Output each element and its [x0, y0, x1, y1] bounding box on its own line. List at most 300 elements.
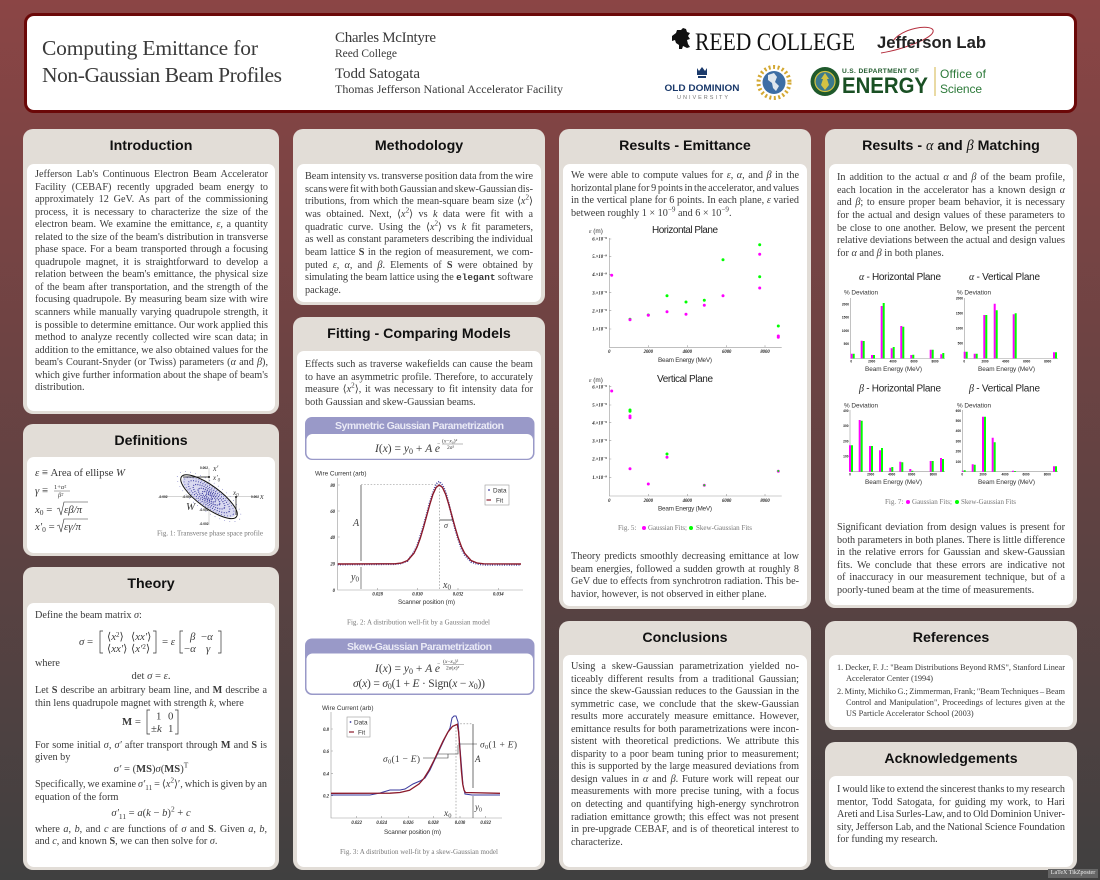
figure 7d: beta vertical bar chart: 2000 [979, 472, 987, 476]
figure 5a: horizontal plane emittance scatter plot: 6000 [722, 350, 732, 355]
figure 5b: vertical plane emittance scatter plot: −9 [603, 456, 607, 460]
figure 3: skew-Gaussian fit chart: y [475, 802, 479, 812]
text: solving for sigma: and c, and known S, we can then solve for σ. [35, 836, 217, 847]
panel body: definitions [27, 457, 275, 553]
figure 1: transverse phase space ellipse: -0.001 [199, 508, 209, 512]
figure 3: skew-Gaussian fit chart: 0 [388, 758, 391, 766]
figure 7b: alpha vertical bar chart: 1500 [956, 312, 963, 316]
figure 7a: alpha horizontal bar chart: 0 [850, 360, 852, 364]
poster title [42, 36, 282, 87]
figure 3: skew-Gaussian fit chart: Fit [358, 730, 365, 736]
panel body: introduction [27, 164, 275, 411]
text: S and M description: Let S describe an arbitrary beam line, and M describe a [35, 685, 267, 696]
figure 5b: vertical plane emittance scatter plot [589, 374, 782, 512]
equation: beam matrix: β [189, 631, 196, 643]
figure 7b: alpha vertical bar chart: % Deviation [957, 290, 991, 296]
text: references list: US Particle Accelerator School (2003) [846, 709, 974, 718]
panel: results - emittance [559, 129, 811, 609]
figure 7c: beta horizontal bar chart: 0 [849, 472, 851, 476]
figure 1: transverse phase space ellipse: W [186, 501, 196, 513]
figure 7d: beta vertical bar chart: 400 [956, 429, 961, 433]
equation: beam matrix: ⟨x [107, 631, 116, 643]
definition formulas: = [44, 504, 52, 516]
equation: beam matrix: ⟨xx′⟩ [131, 631, 151, 643]
figure 5a: horizontal plane emittance scatter plot: 1.×10 [592, 328, 603, 332]
text: introduction: Facility (CEBAF) recently upgraded beam energy to [35, 182, 268, 193]
figure 2: Gaussian fit chart: Wire Current (arb) [315, 470, 366, 478]
block: skew-Gaussian parametrization: A e [424, 663, 440, 675]
panel: results - alpha and beta matching [825, 129, 1077, 608]
figure 5a: horizontal plane emittance scatter plot: −9 [603, 254, 607, 258]
figure 2: Gaussian fit chart: σ [444, 521, 449, 530]
text: fitting intro: Effects such as traverse wakefields can cause the beam [305, 359, 533, 370]
text: sigma11 description: Specifically, we examine σ′11 = ⟨x2⟩′, which is given by an [35, 777, 267, 792]
heading: results emittance: Results - Emittance [619, 138, 751, 154]
text: introduction: quadrupole magnet, it is straightforward to develop a [35, 257, 268, 268]
text: acknowledgements: sity, Jefferson Lab, and the National Science Foundation [837, 822, 1065, 833]
definition formulas: x′ [34, 521, 43, 533]
equation: beam matrix: 2 [142, 643, 146, 651]
figure 7b: alpha vertical bar chart: 2000 [981, 360, 989, 364]
figure 3: skew-Gaussian fit chart: 0 [479, 808, 482, 814]
text: methodology: Beam intensity vs. transverse position data from the wire [305, 171, 533, 182]
logo: Old Dominion University [664, 67, 740, 101]
text: emittance intro: between roughly 1 × 10−9 and 6 × 10−9. [571, 205, 732, 219]
figure 5a: horizontal plane emittance scatter plot: 2.×10 [592, 310, 603, 314]
figure 7d: beta vertical bar chart: Beam Energy (MeV) [978, 479, 1035, 486]
figure 7 caption with legend: Fig. 7: [885, 498, 903, 506]
panel body: acknowledgements [829, 776, 1073, 867]
figure 2: Gaussian fit chart: 40 [329, 536, 336, 541]
figure 5b: vertical plane emittance scatter plot: −9 [603, 402, 607, 406]
logo: Old Dominion University: UNIVERSITY [677, 95, 728, 101]
equation: beam matrix: −α [201, 631, 213, 643]
figure 3: skew-Gaussian fit chart: E) [411, 755, 420, 765]
text: conclusions: this is supported by the large measured deviations from [571, 761, 799, 772]
block: skew-Gaussian parametrization: I(x) = y [375, 663, 409, 675]
heading: introduction: Introduction [110, 138, 192, 154]
text: fitting intro: measure ⟨x2⟩, it was necessary to fit intensity data for [305, 382, 533, 395]
figure 3: skew-Gaussian fit chart: 0.6 [323, 750, 330, 755]
block: symmetric Gaussian parametrization: Symmetric Gaussian Parametrization [335, 420, 504, 432]
figure 5 caption with legend [618, 524, 752, 532]
figure 2: Gaussian fit chart [315, 470, 523, 626]
figure 3: skew-Gaussian fit chart [322, 705, 517, 856]
text: methodology: as well as constant parameters describing the individual [305, 234, 533, 245]
figure 5b: vertical plane emittance scatter plot: 1.×10 [592, 476, 603, 481]
block: skew-Gaussian parametrization: (x−x₀)² [443, 658, 459, 665]
text: matching intro: In addition to the actual α and β of the beam profile, [837, 172, 1065, 183]
logo: US Department of Energy: U.S. DEPARTMENT OF [842, 68, 919, 75]
text: acknowledgements: Areti and Lisa Surles-Law, and to Old Dominion Univer- [837, 809, 1065, 820]
figure 7c: beta horizontal bar chart: 8000 [930, 472, 937, 476]
text: conclusions: in pre-upgrade CEBAF, and is of theoretical interest to [571, 824, 799, 835]
text: sigma11 description: equation of the form [35, 792, 118, 803]
figure 7b: alpha vertical bar chart: 4000 [1002, 360, 1009, 364]
figure 1: transverse phase space ellipse: x′ [212, 464, 219, 473]
text: references list: Accelerator Center (1994) [846, 674, 933, 683]
block: symmetric Gaussian parametrization: 2σ² [447, 445, 454, 451]
figure 1: transverse phase space ellipse [157, 463, 264, 538]
figure 7b: alpha vertical bar chart: 1000 [956, 326, 963, 330]
panel: methodology [293, 129, 545, 305]
figure 7a: alpha horizontal bar chart [842, 272, 945, 373]
text: references list: Control and Manipulation", Proceedings of lectures given at the [846, 698, 1065, 707]
definition formulas: = [46, 521, 55, 533]
figure 5a: horizontal plane emittance scatter plot: 5.×10 [592, 255, 603, 260]
equation: thin lens matrix: ±k [151, 723, 162, 735]
authors: Reed College [335, 48, 397, 60]
logo: Old Dominion University: OLD DOMINION [664, 83, 740, 93]
figure 1: transverse phase space ellipse: 0.002 [251, 495, 259, 499]
panel body: references [829, 655, 1073, 727]
figure 1: transverse phase space ellipse: 0.002 [200, 466, 208, 470]
figure 5a: horizontal plane emittance scatter plot: −9 [603, 308, 607, 312]
poster title: Non-Gaussian Beam Profiles [42, 63, 282, 87]
figure 2: Gaussian fit chart: 0.030 [412, 592, 423, 598]
figure 3: skew-Gaussian fit chart: σ [383, 755, 388, 765]
figure 7d: beta vertical bar chart: 300 [956, 440, 961, 444]
figure 5b: vertical plane emittance scatter plot: 3.×10 [592, 440, 603, 444]
figure 5b: vertical plane emittance scatter plot: 6000 [722, 499, 732, 504]
text: S and M description: thin lens quadrupole magnet with strength k, where [35, 698, 244, 709]
definition formulas: εγ/π [64, 521, 82, 533]
panel: conclusions [559, 621, 811, 870]
figure 7a: alpha horizontal bar chart: 4000 [889, 360, 897, 364]
figure 3: skew-Gaussian fit chart: 0 [448, 812, 451, 820]
poster title: Computing Emittance for [42, 36, 258, 60]
text: initial sigma: given by [35, 752, 70, 763]
panel body: theory [27, 603, 275, 867]
figure 5b: vertical plane emittance scatter plot: 5.×10 [592, 404, 603, 408]
panel body: results matching [829, 164, 1073, 605]
text: conclusions: radiation emittance growth; this effect was not present [571, 812, 799, 823]
figure 7a: alpha horizontal bar chart: 6000 [910, 360, 918, 364]
figure 7 caption with legend: Gaussian Fits; [912, 498, 952, 506]
authors: Todd Satogata [335, 66, 420, 82]
figure 7 caption with legend [885, 498, 1016, 506]
text: conclusions: on detecting and quantifying high-energy synchrotron [571, 799, 799, 810]
text: emittance intro: horizontal plane for 9 points in the accelerator, and values [571, 183, 799, 194]
text: introduction: method to analyze recently collected wire scan data; in [35, 332, 268, 343]
figure 1: transverse phase space ellipse: x [259, 492, 264, 501]
text: methodology: was obtained. Next, ⟨x2⟩ vs k data were fit with a [305, 207, 533, 220]
text: conclusions: results more accurately measure emittance. However, [571, 711, 799, 722]
figure 7d: beta vertical bar chart: 8000 [1044, 472, 1051, 476]
figure 5a: horizontal plane emittance scatter plot: 8000 [760, 350, 770, 355]
equation: sigma transport: σ′ = (MS)σ(MS)T [114, 760, 188, 775]
text: matching intro: relative deviations between the actual and design values [837, 235, 1065, 246]
figure 2: Gaussian fit chart: 0 [447, 584, 451, 592]
definition formulas: 0 [42, 525, 46, 534]
figure 5b: vertical plane emittance scatter plot: −9 [603, 384, 607, 388]
text: matching intro [837, 172, 1066, 259]
heading: fitting: Fitting - Comparing Models [327, 326, 511, 342]
text: S and M description [35, 685, 267, 709]
figure 5b: vertical plane emittance scatter plot: 4.×10 [592, 422, 603, 426]
figure 5b: vertical plane emittance scatter plot: 4000 [682, 499, 693, 504]
figure 7c: beta horizontal bar chart: β - Horizontal Plane [858, 384, 941, 394]
block: skew-Gaussian parametrization: E · Sign(x − x [412, 678, 474, 690]
figure 3: skew-Gaussian fit chart: 0.8 [323, 728, 330, 733]
definition formulas: εβ/π [64, 504, 83, 516]
text: conclusions: Using a skew-Gaussian parametrization yielded no- [571, 661, 799, 672]
authors: Charles McIntyre [335, 30, 436, 46]
text: sigma11 description [35, 777, 267, 803]
equation: beam matrix: ⟩ [120, 631, 124, 643]
text: conclusions: ticeably different results from a traditional Gaussian; [571, 674, 799, 685]
text: methodology: quadratic curve. Using the ⟨x2⟩ vs k fit parameters, [305, 219, 533, 233]
figure 3: skew-Gaussian fit chart: Scanner position (m) [384, 829, 441, 836]
text: introduction: electron beam. We examine the emittance, ε, a quantity [35, 219, 268, 230]
text: introduction: which give further information about the shape of beam's [35, 370, 268, 381]
text: introduction: related to the size of the beam's distribution in transverse [35, 232, 268, 243]
figure 7c: beta horizontal bar chart: 4000 [888, 472, 895, 476]
figure 3: skew-Gaussian fit chart: 0 [485, 744, 488, 751]
logo: US Department of Energy [810, 67, 987, 98]
authors [335, 30, 563, 96]
figure 5b: vertical plane emittance scatter plot: 6.×10 [592, 386, 603, 390]
figure 7a: alpha horizontal bar chart: 2000 [868, 360, 875, 364]
figure 2: Gaussian fit chart: Fig. 2: A distribution well-fit by a Gaussian model [347, 618, 490, 626]
heading: references: References [913, 630, 989, 646]
equation: thin lens matrix: M = [122, 716, 141, 728]
text: methodology: tributions, from which the mean-square beam size ⟨x2⟩ [305, 194, 533, 207]
definition formulas: ε ≡ Area of ellipse W [35, 467, 126, 479]
text: conclusions: characterize. [571, 837, 623, 848]
panel: acknowledgements [825, 742, 1077, 870]
figure 3: skew-Gaussian fit chart: 0.022 [351, 821, 363, 826]
text: introduction: addition to the emittance, we also obtained values for the [35, 345, 268, 356]
text: emittance conclusion: havior, however, is not observed in either plane. [571, 589, 767, 600]
panel body: conclusions [563, 655, 807, 867]
figure 7b: alpha vertical bar chart: 0 [963, 360, 965, 364]
equation: beam matrix: ⟩ [146, 643, 150, 655]
text: introduction [35, 169, 268, 393]
figure 7c: beta horizontal bar chart: 100 [843, 454, 849, 458]
figure 7b: alpha vertical bar chart: α - Vertical Plane [969, 272, 1040, 283]
figure 5a: horizontal plane emittance scatter plot: −9 [603, 326, 607, 330]
text: matching intro: for α and β in both planes. [837, 248, 944, 259]
figure 7c: beta horizontal bar chart: % Deviation [844, 402, 878, 410]
text: matching conclusion: both parameters in both planes. There is little difference [837, 535, 1065, 546]
figure 5a: horizontal plane emittance scatter plot: −9 [603, 236, 607, 240]
equation: beam matrix: = ε [162, 636, 176, 648]
block: skew-Gaussian parametrization: σ(x) = σ [353, 678, 388, 690]
panel: references [825, 621, 1077, 730]
equation: thin lens matrix: 1 [156, 710, 161, 722]
figure 1: transverse phase space ellipse: -0.002 [158, 495, 168, 499]
text: introduction: relation between the beam's emittance, the physical size [35, 269, 268, 280]
block: skew-Gaussian parametrization: − [437, 662, 440, 668]
figure 5b: vertical plane emittance scatter plot: 2.×10 [592, 458, 603, 462]
text: fitting intro: to have an asymmetric profile. Therefore, to accurately [305, 372, 533, 383]
figure 7d: beta vertical bar chart: β - Vertical Plane [968, 384, 1040, 394]
figure 2: Gaussian fit chart: A [352, 518, 360, 529]
figure 5a: horizontal plane emittance scatter plot: 0 [608, 350, 611, 355]
definition formulas: x [34, 504, 40, 516]
text: initial sigma [35, 740, 267, 763]
text: acknowledgements: mentor, Todd Satogata, for guiding my work, to Hari [837, 797, 1065, 808]
text: matching conclusion: Significant deviation from design values is present for [837, 522, 1065, 533]
footer badge: LaTeX tikzposter: LaTeX TikZposter [1051, 870, 1095, 876]
block: symmetric Gaussian parametrization: (x−x₀)² [442, 438, 458, 444]
figure 3: skew-Gaussian fit chart: 0.030 [455, 821, 466, 826]
equation: beam matrix: −α [184, 643, 196, 655]
text: emittance intro [571, 170, 799, 219]
text: conclusions: symmetric case, we conclude that the skew-Gaussian [571, 699, 799, 710]
text: methodology: simulating the beam lattice using the elegant software [305, 272, 533, 283]
figure 7a: alpha horizontal bar chart: 1000 [842, 329, 849, 333]
logo: US Department of Energy: Science [940, 82, 982, 96]
text: introduction: beam's Courant-Snyder (or Twiss) parameters (α and β), [35, 357, 268, 368]
text: matching intro: and β; to ensure proper beam behavior, it is necessary [837, 197, 1065, 208]
figure 2: Gaussian fit chart: x [443, 580, 447, 591]
equation: beam matrix [79, 631, 221, 655]
text: introduction: is possible to determine emittance. Our work applied this [35, 320, 268, 331]
figure 7c: beta horizontal bar chart [843, 384, 945, 486]
figure 1: transverse phase space ellipse: 0 [236, 494, 239, 498]
figure 7d: beta vertical bar chart: 500 [956, 419, 961, 423]
block: symmetric Gaussian parametrization: − [437, 441, 440, 447]
text: references list [837, 663, 1065, 718]
figure 5a: horizontal plane emittance scatter plot: 4000 [682, 350, 693, 355]
figure 7c: beta horizontal bar chart: 200 [843, 440, 849, 444]
text: emittance conclusion [571, 551, 799, 600]
equation: quadratic form: σ′11 = a(k − b)2 + c [111, 804, 191, 821]
figure 2: Gaussian fit chart: 0 [355, 576, 359, 584]
heading: methodology: Methodology [375, 138, 463, 154]
text: introduction: phase space. For a beam transported through a focusing [35, 244, 268, 255]
figure 7a: alpha horizontal bar chart: α - Horizontal Plane [859, 272, 941, 283]
block: symmetric Gaussian parametrization: I(x) = y [375, 443, 409, 455]
panel: fitting - comparing models [293, 317, 545, 870]
text: solving for sigma [35, 824, 267, 847]
figure 5 caption with legend: Gaussian Fits; [648, 524, 687, 532]
text: emittance conclusion: beam energies, followed a sudden growth at roughly 8 [571, 564, 799, 575]
figure 7b: alpha vertical bar chart [956, 272, 1058, 373]
definition formulas [34, 467, 126, 534]
figure 7c: beta horizontal bar chart: 400 [843, 409, 849, 413]
figure 5b: vertical plane emittance scatter plot: −9 [603, 438, 607, 442]
figure 7b: alpha vertical bar chart: 8000 [1044, 360, 1051, 364]
text: introduction: approximately 12 GeV. As part of the commissioning [35, 194, 268, 205]
text: emittance conclusion: GeV due to effects from synchrotron radiation. This be- [571, 576, 799, 587]
figure 7b: alpha vertical bar chart: Beam Energy (MeV) [978, 366, 1035, 373]
equation: thin lens matrix: 1 [168, 723, 173, 735]
figure 1: transverse phase space ellipse: 0 [218, 478, 221, 484]
figure 5a: horizontal plane emittance scatter plot: 3.×10 [592, 292, 603, 296]
equation: beam matrix: ⟨xx′⟩ [107, 643, 127, 655]
figure 2: Gaussian fit chart: 80 [330, 484, 336, 489]
text: methodology [305, 171, 533, 296]
equation: beam matrix: γ [206, 643, 211, 655]
figure 3: skew-Gaussian fit chart: σ [480, 740, 485, 750]
figure 7a: alpha horizontal bar chart: 500 [844, 342, 849, 346]
equation: thin lens matrix [122, 710, 178, 735]
figure 7b: alpha vertical bar chart: 6000 [1023, 360, 1030, 364]
text: matching conclusion [837, 522, 1065, 596]
block: skew-Gaussian parametrization: (1 + [392, 678, 413, 690]
figure 5a: horizontal plane emittance scatter plot: ε (m) [589, 228, 603, 235]
figure 5a: horizontal plane emittance scatter plot: Beam Energy (MeV) [658, 357, 712, 364]
heading: acknowledgements: Acknowledgements [884, 751, 1018, 767]
heading: theory: Theory [127, 576, 175, 592]
figure 2: Gaussian fit chart: 0.034 [493, 592, 504, 598]
definition formulas: 0 [40, 508, 44, 517]
block: skew-Gaussian parametrization: 0 [388, 682, 392, 691]
heading: results matching: Results - α and β Matching [862, 138, 1040, 154]
figure 3: skew-Gaussian fit chart: A [474, 754, 481, 764]
figure 5a: horizontal plane emittance scatter plot: −9 [603, 290, 607, 294]
equation: thin lens matrix: 0 [168, 710, 173, 722]
panel body: results emittance [563, 164, 807, 606]
panel: introduction [23, 129, 279, 414]
text: matching conclusion: poorly-tuned beam at the time of measurements. [837, 585, 1034, 596]
figure 7d: beta vertical bar chart: 4000 [1001, 472, 1009, 476]
panel body: methodology [297, 164, 541, 302]
text: introduction: Jefferson Lab's Continuous Electron Beam Accelerator [35, 169, 268, 180]
figure 5b: vertical plane emittance scatter plot: 0 [608, 499, 611, 504]
text: conclusions: sistent with theoretical predictions. We attribute this [571, 736, 799, 747]
text: references list: 2. Minty, Michiko G.; Zimmerman, Frank; "Beam Techniques – Beam [837, 687, 1065, 696]
figure 7a: alpha horizontal bar chart: 2000 [842, 302, 849, 306]
block: skew-Gaussian parametrization: + [413, 663, 425, 675]
text: introduction: distribution. [35, 382, 85, 393]
figure 3: skew-Gaussian fit chart: E) [508, 740, 517, 750]
figure 5a: horizontal plane emittance scatter plot: 6.×10 [592, 238, 603, 242]
definition formulas: 1+α² [54, 484, 66, 491]
figure 7d: beta vertical bar chart: % Deviation [957, 402, 991, 410]
figure 7c: beta horizontal bar chart: 2000 [867, 472, 874, 476]
figure 2: Gaussian fit chart: 60 [330, 510, 336, 515]
logo: NSF seal [758, 67, 790, 98]
text: matching conclusion: of inaccuracy in our measurement technique, but of a [837, 572, 1065, 583]
figure 7c: beta horizontal bar chart: 300 [843, 424, 849, 428]
figure 2: Gaussian fit chart: Scanner position (m) [398, 599, 455, 606]
figure 7 caption with legend: Skew-Gaussian Fits [961, 498, 1016, 506]
figure 2: Gaussian fit chart: Data [493, 487, 507, 494]
text: emittance intro: We were able to compute values for ε, α, and β in the [571, 170, 799, 181]
text: conclusions [571, 661, 799, 848]
figure 3: skew-Gaussian fit chart: Fig. 3: A distribution well-fit by a skew-Gaussian model [340, 848, 498, 856]
definition formulas: β² [57, 492, 64, 499]
figure 3: skew-Gaussian fit chart: 0.4 [323, 773, 330, 778]
logo: US Department of Energy: Office of [940, 67, 987, 81]
figure 7b: alpha vertical bar chart: 500 [958, 342, 963, 346]
block: skew-Gaussian parametrization [305, 638, 534, 695]
figure 5b: vertical plane emittance scatter plot: Beam Energy (MeV) [658, 506, 712, 512]
logo: Jefferson Lab: Jefferson Lab [877, 33, 986, 52]
text: conclusions: since the skew-Gaussian reduces to the Gaussian in the [571, 686, 799, 697]
block: skew-Gaussian parametrization: 0 [409, 667, 413, 676]
figure 7c: beta horizontal bar chart: Beam Energy (MeV) [865, 479, 922, 486]
logo: US Department of Energy: ENERGY [842, 73, 928, 98]
figure 3: skew-Gaussian fit chart: (1 + [488, 740, 508, 750]
figure 1: transverse phase space ellipse: -0.002 [199, 522, 209, 526]
figure 7d: beta vertical bar chart: 600 [956, 409, 961, 413]
text: matching intro: each location in the accelerator has a known design α [837, 185, 1065, 196]
title banner [24, 13, 1077, 113]
panel body: fitting [297, 351, 541, 867]
figure 5a: horizontal plane emittance scatter plot [589, 225, 782, 364]
text: methodology: puted ε, α, and β. Elements of S were obtained by [305, 260, 533, 271]
figure 5b: vertical plane emittance scatter plot: Vertical Plane [657, 374, 713, 385]
text: conclusions: disparity to a poor beam tuning prior to measurement; [571, 749, 799, 760]
figure 3: skew-Gaussian fit chart: Data [354, 720, 368, 726]
figure 2: Gaussian fit chart: 0.028 [372, 592, 384, 598]
figure 5a: horizontal plane emittance scatter plot: Horizontal Plane [652, 225, 718, 236]
